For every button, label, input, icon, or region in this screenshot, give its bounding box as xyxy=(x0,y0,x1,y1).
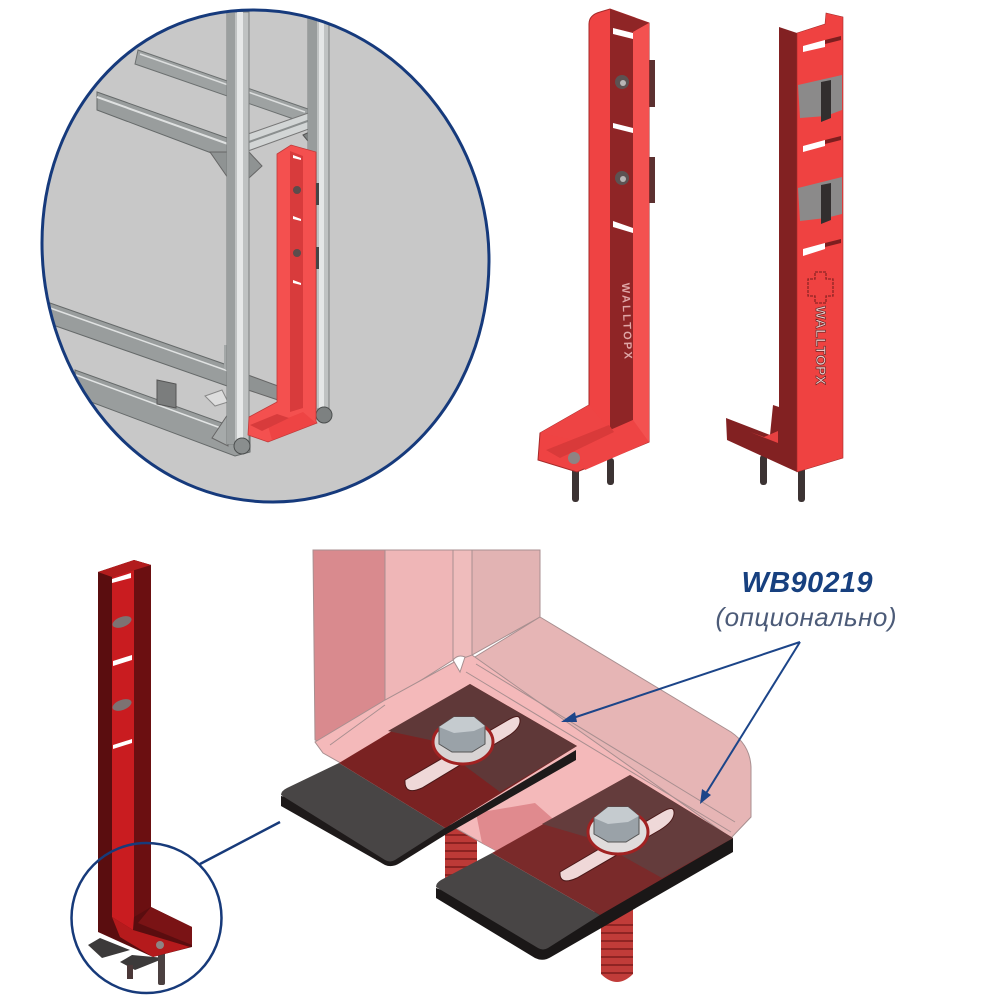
leader line xyxy=(200,822,280,864)
side clips xyxy=(649,60,655,203)
slots xyxy=(803,40,825,256)
enlarged foot detail xyxy=(281,550,751,982)
bolts below foot xyxy=(572,458,614,502)
slots xyxy=(112,573,132,749)
stamped brand text: WALLTOPX xyxy=(619,283,634,360)
panel: circular assembly view xyxy=(42,10,489,502)
plates under foot xyxy=(88,938,165,985)
cross logo xyxy=(808,272,833,303)
red bracket, inside view xyxy=(538,9,655,502)
detail circle xyxy=(72,843,222,993)
red bracket, outside view xyxy=(726,13,843,502)
bolt head xyxy=(433,720,493,764)
arrow: to second plate xyxy=(700,642,800,804)
windows with clips xyxy=(798,75,842,224)
dark red bracket with detail circle xyxy=(72,560,280,993)
arrow: to first plate xyxy=(561,642,800,722)
bolt head xyxy=(588,810,648,854)
plate one xyxy=(281,684,577,866)
bolts xyxy=(111,614,133,630)
vertical posts xyxy=(227,12,249,444)
label: product code: WB90219 xyxy=(742,567,872,599)
slot xyxy=(405,716,520,791)
threaded bolts xyxy=(445,825,633,982)
stamped brand text: WALLTOPX xyxy=(813,306,829,386)
slots xyxy=(613,28,633,233)
plate two xyxy=(436,775,733,960)
bolts below foot xyxy=(760,455,805,502)
red bracket in frame xyxy=(248,145,319,442)
label: optional note: (опционально) xyxy=(716,602,896,632)
slot xyxy=(560,808,674,881)
bolts xyxy=(615,75,629,89)
transparent bracket xyxy=(313,550,751,870)
aluminium frame rails xyxy=(50,12,332,456)
